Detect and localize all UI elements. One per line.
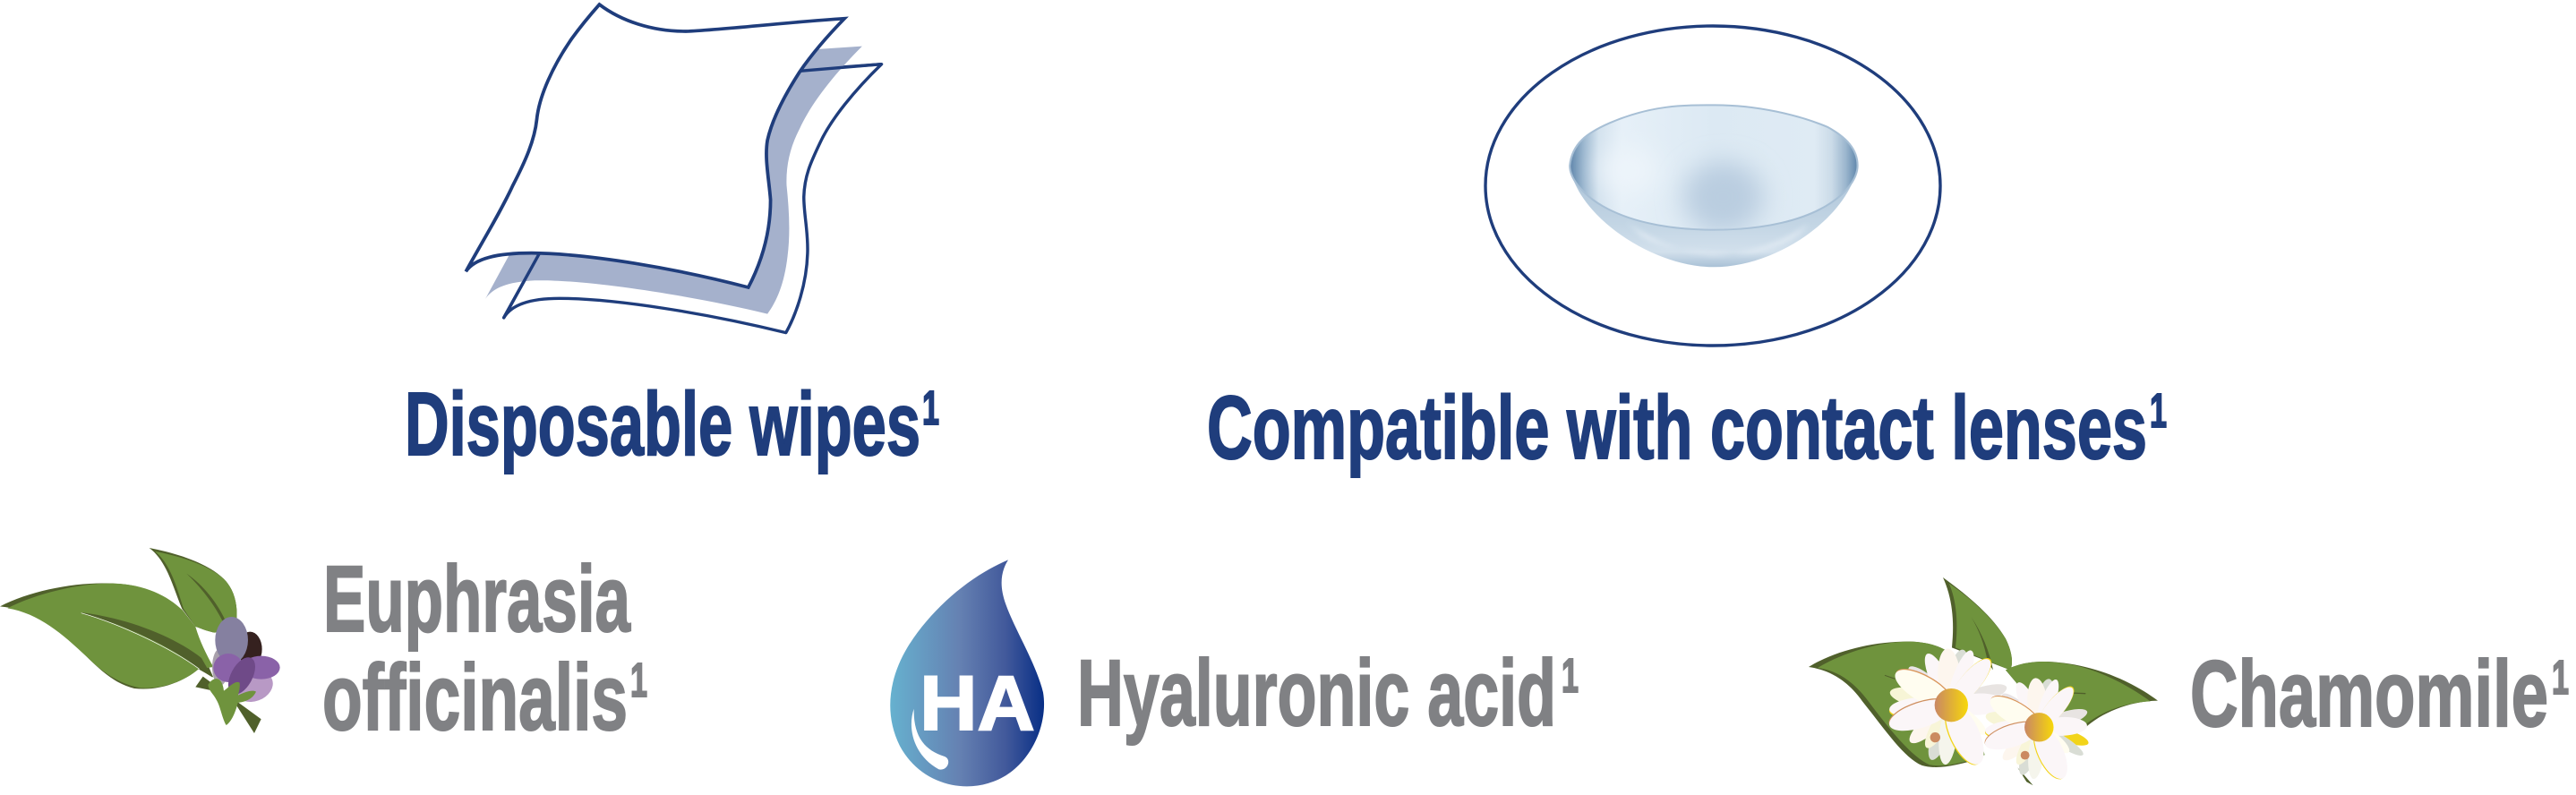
label: euphrasia officinalis: officinalis: [322, 645, 628, 750]
label: euphrasia officinalis: Euphrasia: [323, 547, 631, 652]
top leaf: [150, 548, 237, 633]
first flower: [1885, 647, 2009, 771]
top leaf: [1943, 577, 2012, 670]
wipe shadow: [485, 47, 862, 314]
label: hyaluronic acid: Hyaluronic acid: [1077, 641, 1556, 746]
sepals: [208, 679, 256, 725]
drop highlight: [911, 709, 948, 770]
heading: compatible with contact lenses: Compatible with contact lenses: [1207, 378, 2147, 478]
outer ellipse: [1485, 26, 1940, 346]
label: euphrasia officinalis: 1: [630, 654, 647, 707]
stem: [195, 677, 261, 733]
icon: disposable wipes: [466, 4, 882, 333]
label: euphrasia officinalis: [322, 547, 647, 750]
large leaf: [0, 583, 213, 689]
flower core: [2024, 713, 2054, 742]
back wipe: [504, 64, 882, 333]
heading: disposable wipes: Disposable wipes: [405, 374, 920, 474]
HA letters: HA: [920, 661, 1035, 747]
right leaf: [2006, 662, 2158, 734]
heading: disposable wipes: 1: [922, 381, 939, 435]
icon: euphrasia plant: [0, 548, 280, 733]
contact lens: [1570, 105, 1858, 267]
second flower: [1981, 677, 2091, 784]
back wipe edges over shadow: [504, 64, 882, 318]
icon: contact lens in circle: [1485, 26, 1940, 346]
icon: chamomile flowers: [1809, 577, 2158, 785]
stem: [2017, 767, 2033, 785]
front wipe: [466, 4, 844, 287]
left leaf: [1809, 642, 1981, 767]
flower petals: [238, 632, 262, 666]
drop: [890, 560, 1044, 786]
flower core: [1935, 688, 1968, 722]
heading: compatible with contact lenses: 1: [2150, 384, 2167, 438]
icon: hyaluronic acid drop: [890, 560, 1044, 786]
label: hyaluronic acid: 1: [1562, 649, 1579, 703]
